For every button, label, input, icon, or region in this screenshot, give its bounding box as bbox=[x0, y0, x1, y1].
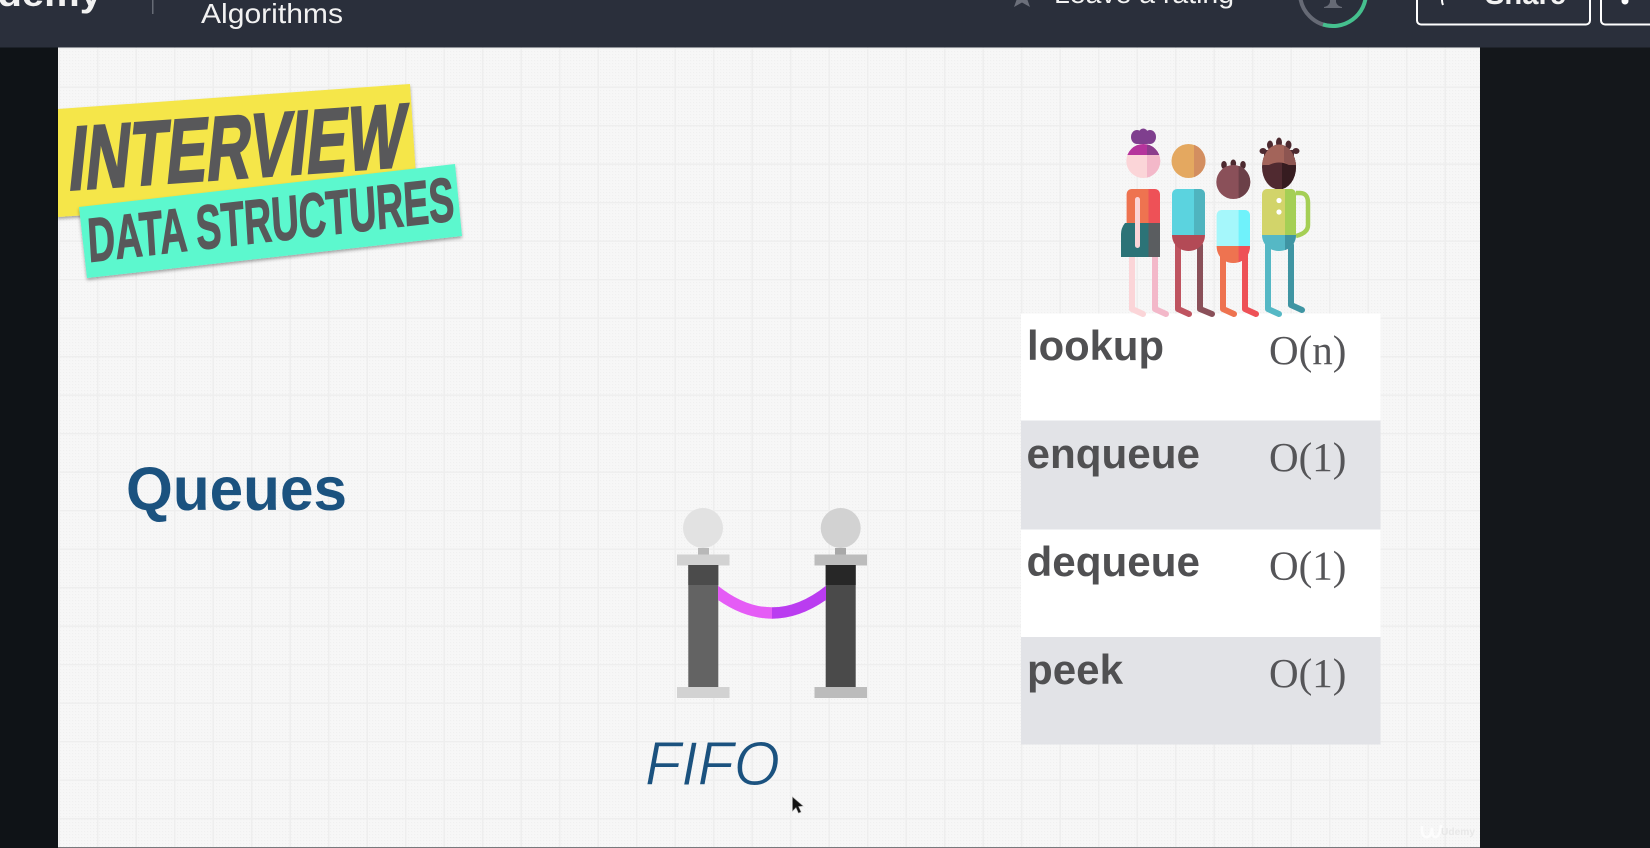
row: enqueue: enqueue bbox=[1026, 430, 1200, 477]
person 4 bbox=[1260, 138, 1308, 314]
row: lookup bbox=[1021, 314, 1380, 420]
row: lookup: O(n) bbox=[1269, 327, 1346, 373]
person 1 bbox=[1121, 128, 1166, 314]
row: enqueue: O(1) bbox=[1269, 434, 1346, 480]
row: peek: O(1) bbox=[1269, 650, 1346, 696]
interview text: INTERVIEW bbox=[65, 85, 411, 210]
heading: queues: Queues bbox=[126, 455, 347, 523]
icon: share arrow fragment bbox=[1442, 0, 1443, 5]
udemy watermark bbox=[1422, 825, 1475, 838]
more options button bbox=[1601, 0, 1650, 24]
row: dequeue: O(1) bbox=[1269, 542, 1346, 588]
person 2 bbox=[1171, 144, 1212, 314]
row: dequeue: dequeue bbox=[1026, 538, 1200, 585]
row: dequeue bbox=[1021, 530, 1380, 637]
icon: trophy base bbox=[1324, 0, 1342, 8]
row: lookup: lookup bbox=[1027, 322, 1164, 369]
icon: rope barrier bbox=[677, 508, 867, 698]
icon: watermark logo bbox=[1422, 825, 1441, 837]
row: enqueue bbox=[1021, 420, 1380, 530]
right stanchion bbox=[814, 508, 867, 698]
progress ring bbox=[1300, 0, 1366, 26]
illustration: people in a queue bbox=[1121, 128, 1308, 314]
banner: data structures bbox=[79, 164, 462, 278]
progress ring value bbox=[1323, 0, 1366, 26]
row: peek: peek bbox=[1027, 646, 1124, 693]
banner: interview bbox=[58, 84, 417, 217]
row: peek bbox=[1021, 637, 1380, 744]
data structures text: DATA STRUCTURES bbox=[86, 165, 456, 276]
share button bbox=[1417, 0, 1590, 24]
rope bbox=[718, 586, 826, 619]
watermark name: Udemy bbox=[1441, 826, 1475, 838]
top navigation bar bbox=[0, 0, 1650, 48]
fifo label: FIFO bbox=[645, 730, 780, 799]
header divider bbox=[152, 0, 154, 14]
course banner bbox=[58, 84, 462, 278]
more options dot bbox=[1622, 0, 1628, 4]
progress ring track bbox=[1300, 0, 1333, 26]
left stanchion bbox=[677, 508, 730, 698]
person 3 bbox=[1216, 160, 1256, 314]
icon: rating star bbox=[1011, 0, 1033, 7]
big o table bbox=[1021, 314, 1380, 744]
icon: mouse cursor bbox=[792, 797, 803, 813]
